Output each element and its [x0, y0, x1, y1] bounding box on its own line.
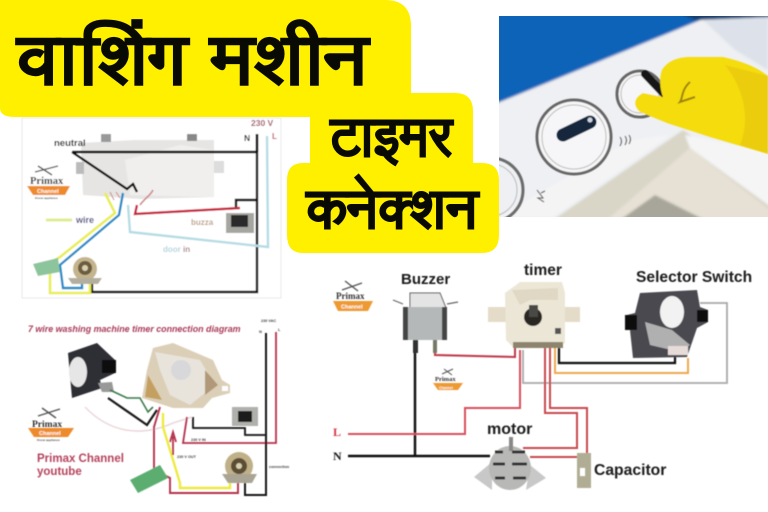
dial: right [617, 71, 664, 117]
labels [333, 262, 752, 479]
wire: yellow [50, 193, 115, 293]
labels: Capacitor [594, 462, 666, 479]
dial: left [499, 156, 526, 217]
wire: blue [60, 193, 123, 288]
blue background [499, 16, 701, 104]
logo: Primax small: Primax [435, 376, 456, 383]
title text: वाशिंग मशीन [16, 11, 370, 119]
capacitor [130, 465, 168, 493]
logo: Primax: Know appliance [37, 438, 60, 442]
timer body [76, 134, 224, 200]
banner: washing machine title [0, 0, 411, 119]
logo: Primax top: Channel [341, 304, 363, 310]
logo: Primax top [333, 281, 373, 311]
logo: Primax: Channel [39, 431, 61, 437]
subtitle line 1: टाइमर [329, 98, 454, 184]
text: Primax Channel youtube: youtube [37, 466, 82, 478]
small labels: N [259, 329, 262, 334]
icon: small symbol [537, 190, 545, 202]
labels: L [272, 132, 277, 141]
wire: light blue [128, 136, 268, 247]
logo: Primax top: Primax [336, 291, 365, 301]
labels: L [333, 425, 341, 439]
small labels: 230 VAC [261, 319, 276, 323]
wire: neutral black [72, 152, 257, 292]
motor [222, 452, 257, 483]
labels: door in [163, 245, 190, 254]
logo: Primax small: Channel [439, 386, 453, 390]
logo: Primax: Primax [30, 176, 64, 187]
selector switch [625, 290, 708, 358]
buzzer [226, 213, 254, 233]
logo: Primax [27, 166, 70, 200]
small labels: 230 V IN [191, 438, 206, 442]
small labels: connection [269, 465, 290, 469]
small labels: 230 V OUT [177, 455, 197, 459]
capacitor [33, 258, 60, 276]
labels: wire [75, 215, 94, 225]
labels: N [244, 133, 250, 143]
buzzer [393, 293, 458, 353]
motor [474, 437, 546, 490]
panel: wiring diagram 2 [28, 319, 290, 495]
buzzer [232, 407, 258, 426]
arrow [170, 432, 176, 455]
logo: Primax small [433, 369, 463, 390]
logo: Primax: Channel [37, 189, 59, 195]
small labels [177, 319, 290, 469]
logo: Primax: Know appliance [35, 196, 58, 200]
yellow glove [635, 57, 768, 154]
panel: wiring diagram 1 [22, 118, 281, 298]
logo: Primax [28, 408, 74, 442]
labels: neutral [54, 138, 86, 149]
logo: Primax: Primax [32, 420, 62, 430]
labels: timer [524, 262, 562, 279]
dial: centre [537, 100, 611, 174]
labels: motor [487, 421, 532, 438]
labels: Selector Switch [636, 269, 752, 286]
basin [553, 130, 768, 220]
labels: 230 V [251, 118, 274, 128]
wire: red [135, 205, 240, 214]
banner: timer connection [287, 93, 499, 256]
heading: 7 wire washing machine timer connection diagram [28, 324, 241, 334]
panel: wiring diagram 3 [333, 262, 752, 490]
labels: N [333, 449, 342, 463]
capacitor [577, 453, 591, 488]
icon: water waves [620, 135, 630, 146]
small labels: L [278, 327, 281, 332]
subtitle line 2: कनेक्शन [305, 170, 480, 256]
timer [488, 282, 580, 348]
wires [414, 347, 416, 455]
selector switch [68, 343, 116, 398]
timer [142, 343, 230, 408]
wires [85, 407, 192, 431]
panel: photo of washing machine dials [499, 16, 768, 217]
labels [46, 118, 277, 254]
text: Primax Channel youtube: Primax Channel [37, 453, 124, 465]
motor [68, 257, 102, 284]
labels: buzza [191, 218, 214, 227]
labels: Buzzer [401, 271, 450, 288]
